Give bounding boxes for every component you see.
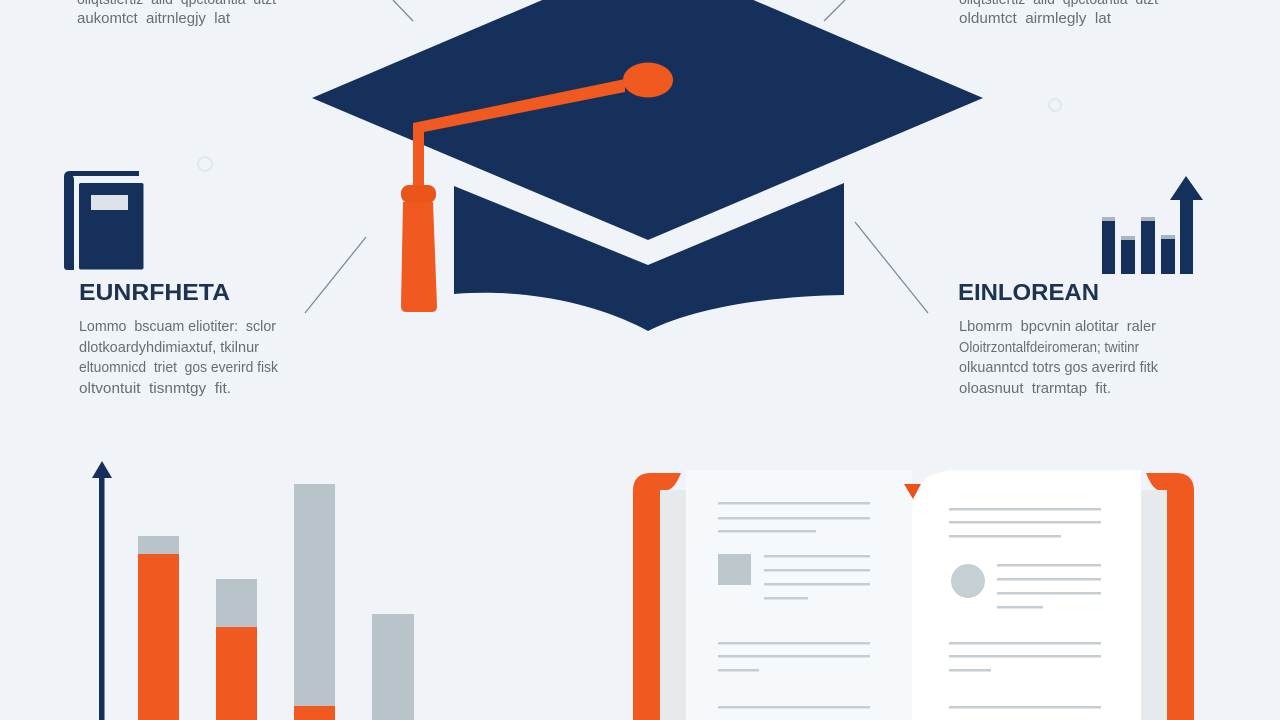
bar 4 [372,614,414,720]
bookmark [904,484,921,499]
text block: left [79,318,278,397]
icon: book [64,171,144,270]
text block: top left: aukomtct aitrnlegjy lat [77,10,231,27]
heading: left: EUNRFHETA [79,279,230,305]
text block: left: Lommo bscuam eliotiter: sclor [79,318,276,335]
left page [686,470,912,720]
right page [912,470,1141,720]
bar 1 [138,536,179,720]
text block: right: olkuanntcd totrs gos averird fitk [959,359,1158,376]
text block: right: oloasnuut trarmtap fit. [959,380,1111,397]
connector: lower left [305,237,366,313]
text block: top right [959,0,1159,27]
bar 3 [294,484,335,720]
connector: top left [393,0,413,21]
image placeholder square [718,554,751,585]
text block: right: Lbomrm bpcvnin alotitar raler [959,318,1156,335]
tassel button [623,62,673,98]
right page edge [1141,490,1167,720]
heading: right: EINLOREAN [958,279,1099,305]
connector: top right [824,0,845,21]
text block: left: dlotkoardyhdimiaxtuf, tkilnur [79,339,259,356]
text block: top left [77,0,277,27]
tassel body [401,202,437,312]
text block: left: oltvontuit tisnmtgy fit. [79,380,231,397]
axis arrow [92,461,112,720]
left cover [633,473,681,720]
cap base [454,183,844,331]
text block: left: eltuomnicd triet gos everird fisk [79,359,278,376]
left page text lines [718,502,870,708]
text block: right: Oloitrzontalfdeiromeran; twitinr [959,339,1139,356]
text block: right [959,318,1158,397]
bar 2 [216,579,257,720]
icon: graduation cap [312,0,983,331]
tassel cord [413,79,625,186]
mortarboard [312,0,983,240]
open book [633,470,1194,720]
image placeholder circle [951,564,985,598]
right page text lines [949,508,1101,708]
text block: top right: oldumtct airmlegly lat [959,10,1112,27]
tassel knot [401,185,436,203]
bar chart [92,461,414,720]
right cover [1146,473,1194,720]
left page edge [660,490,687,720]
connector: lower right [855,222,928,313]
icon: rising bar chart with arrow [1102,176,1203,274]
